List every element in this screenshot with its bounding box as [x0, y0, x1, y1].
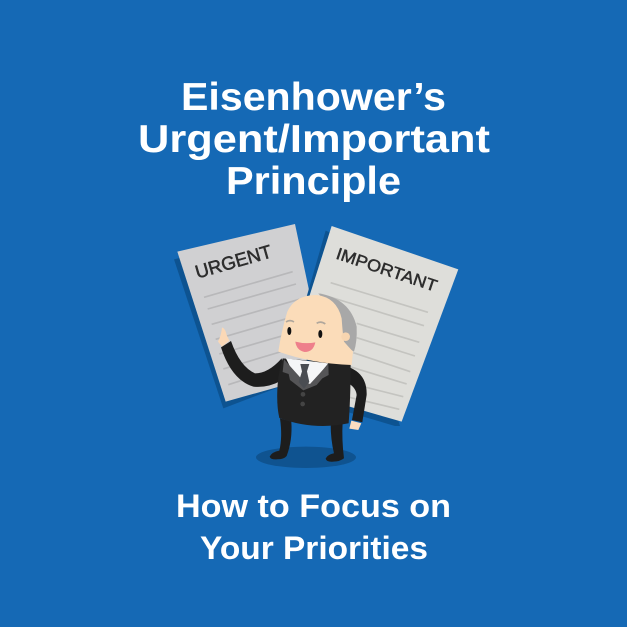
legs and shoes	[270, 418, 344, 462]
lapels	[283, 359, 329, 390]
illustration: papers and businessman	[174, 224, 458, 468]
ear	[341, 332, 350, 341]
suit body	[277, 358, 351, 426]
paper: urgent	[174, 224, 327, 408]
subtitle: Your Priorities	[200, 530, 428, 566]
title: Principle	[226, 160, 401, 203]
paper label: urgent: URGENT	[193, 241, 274, 283]
title: Eisenhower’s	[181, 76, 446, 119]
raised arm	[221, 341, 285, 387]
mouth	[295, 342, 315, 352]
businessman	[218, 293, 367, 462]
title: Urgent/Important	[138, 118, 490, 161]
tie	[299, 364, 309, 389]
right hand	[349, 421, 361, 430]
subtitle: How to Focus on	[176, 488, 451, 524]
head	[278, 295, 353, 365]
raised hand	[218, 327, 229, 347]
shirt	[286, 358, 328, 385]
buttons	[301, 392, 305, 397]
title	[138, 76, 490, 203]
hair	[318, 293, 357, 352]
ground shadow	[256, 447, 356, 468]
subtitle	[176, 488, 451, 566]
paper: important	[307, 226, 458, 426]
eyes and brows	[286, 321, 325, 338]
paper label: important: IMPORTANT	[334, 244, 440, 296]
right arm	[345, 367, 367, 422]
